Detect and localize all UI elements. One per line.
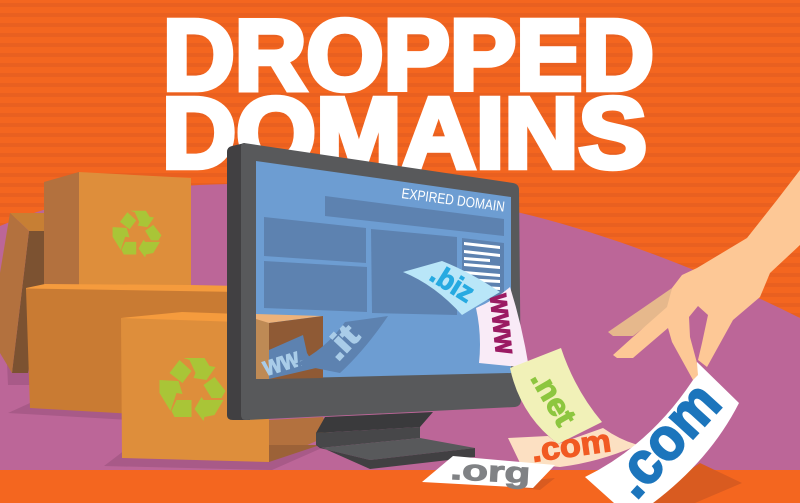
paper: .biz: .biz	[425, 258, 480, 308]
box: top recycling box	[44, 172, 191, 288]
box: open back box	[0, 213, 46, 373]
paper: www	[476, 287, 529, 368]
screen heading: EXPIRED DOMAIN	[400, 186, 506, 216]
cardboard boxes	[0, 172, 340, 470]
paper: orange .com: .com	[529, 422, 613, 469]
floor shadows	[6, 340, 340, 470]
screen: text lines	[464, 242, 500, 290]
title: DOMAINS	[162, 78, 647, 190]
back finger	[608, 288, 672, 336]
ghost paper: .it	[295, 316, 388, 373]
icon: recycle small	[113, 211, 161, 257]
paper: .net	[510, 348, 602, 444]
orange floor band	[0, 470, 800, 503]
box: front recycling box	[121, 312, 330, 462]
paper: orange .com	[508, 422, 638, 469]
box: wide middle box	[26, 284, 240, 420]
icon: recycle large	[160, 358, 226, 421]
monitor stand	[316, 412, 475, 469]
paper: .org: .org	[450, 454, 531, 490]
paper: .org	[422, 454, 555, 490]
screen	[256, 161, 511, 379]
title	[162, 0, 654, 190]
monitor	[227, 143, 521, 420]
ghost paper: www: ww.	[258, 341, 308, 382]
paper: .biz	[403, 258, 500, 315]
hand	[608, 170, 800, 380]
purple backdrop	[0, 184, 800, 470]
ghost paper: .it: .it	[317, 317, 367, 367]
paper: .net: .net	[524, 364, 583, 432]
title: DROPPED	[163, 0, 654, 112]
screen: layout panels	[264, 196, 504, 315]
box inside screen	[256, 314, 323, 379]
paper: www: www	[483, 291, 522, 356]
